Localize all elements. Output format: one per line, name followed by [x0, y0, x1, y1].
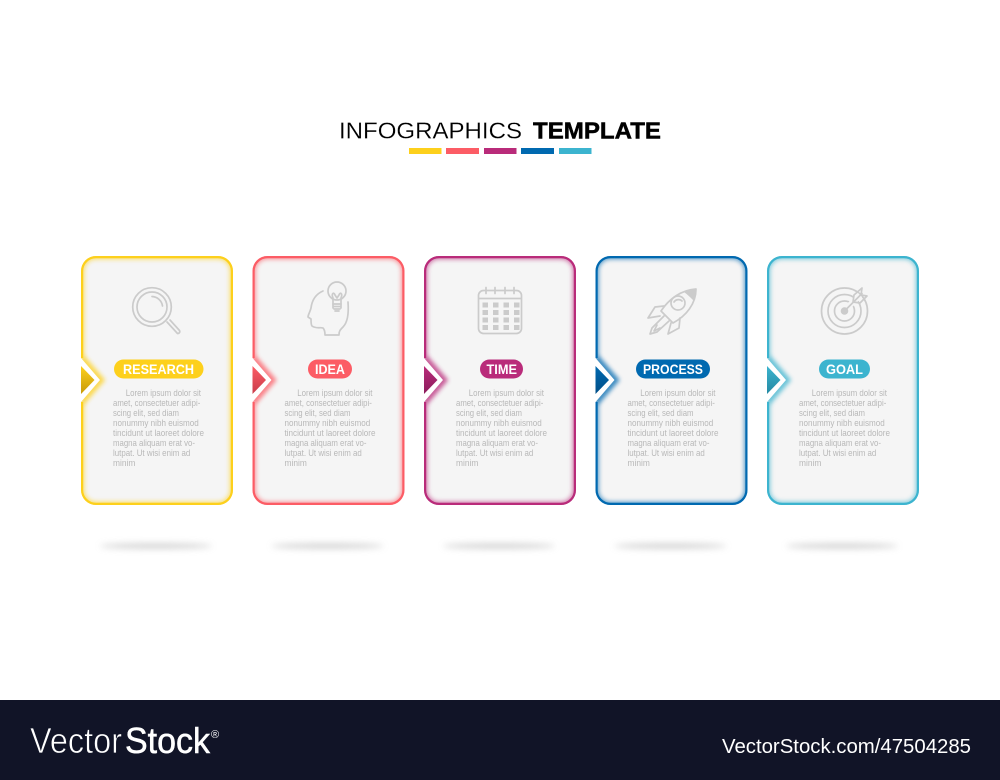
text block: idea: Lorem ipsum dolor sit — [297, 388, 373, 398]
text block: goal: nonummy nibh euismod — [799, 418, 885, 428]
icon: target with arrow — [822, 288, 868, 334]
text block: research: Lorem ipsum dolor sit — [126, 388, 201, 398]
text block: research: lutpat. Ut wisi enim ad — [113, 448, 190, 458]
arrow marker: time — [424, 366, 438, 394]
arrow marker: process — [596, 366, 609, 394]
footer logo: Stock — [125, 720, 211, 761]
text block: research: amet, consectetuer adipi- — [113, 398, 200, 408]
panel: idea — [252, 256, 404, 549]
text block: research: nonummy nibh euismod — [113, 418, 199, 428]
title: INFOGRAPHICS — [339, 118, 522, 144]
text block: goal: tincidunt ut laoreet dolore — [799, 428, 890, 438]
panel: process — [596, 256, 748, 549]
text block: idea — [284, 388, 376, 468]
text block: idea: magna aliquam erat vo- — [284, 438, 366, 448]
arrow marker: research — [81, 366, 94, 394]
text block: process: nonummy nibh euismod — [628, 418, 713, 428]
footer logo: ® — [211, 729, 219, 741]
title — [339, 118, 661, 144]
title: TEMPLATE — [533, 118, 661, 144]
text block: research: tincidunt ut laoreet dolore — [113, 428, 204, 438]
text block: time: amet, consectetuer adipi- — [456, 398, 543, 408]
icon: rocket — [648, 289, 696, 334]
icon: head with light bulb — [308, 282, 348, 335]
text block: idea: amet, consectetuer adipi- — [284, 398, 372, 408]
text block: process: magna aliquam erat vo- — [628, 438, 710, 448]
text block: research: minim — [113, 458, 135, 468]
text block: time: Lorem ipsum dolor sit — [469, 388, 544, 398]
text block: goal: lutpat. Ut wisi enim ad — [799, 448, 876, 458]
text block: research: scing elit, sed diam — [113, 408, 179, 418]
label: idea — [308, 360, 352, 378]
text block: research: magna aliquam erat vo- — [113, 438, 195, 448]
panel: goal — [767, 256, 919, 549]
title colour bars — [409, 148, 592, 154]
text block: process: scing elit, sed diam — [628, 408, 694, 418]
text block: process: Lorem ipsum dolor sit — [640, 388, 716, 398]
text block: goal: minim — [799, 458, 821, 468]
text block: process: lutpat. Ut wisi enim ad — [628, 448, 705, 458]
text block: time: lutpat. Ut wisi enim ad — [456, 448, 533, 458]
text block: goal — [799, 388, 890, 468]
text block: process — [628, 388, 718, 468]
icon: magnifying glass — [133, 288, 180, 334]
text block: time: nonummy nibh euismod — [456, 418, 542, 428]
label: time: TIME — [486, 362, 517, 377]
text block: goal: Lorem ipsum dolor sit — [812, 388, 887, 398]
text block: idea: lutpat. Ut wisi enim ad — [284, 448, 362, 458]
text block: idea: scing elit, sed diam — [284, 408, 350, 418]
text block: process: minim — [628, 458, 650, 468]
text block: time: tincidunt ut laoreet dolore — [456, 428, 547, 438]
text block: idea: nonummy nibh euismod — [284, 418, 370, 428]
text block: time: scing elit, sed diam — [456, 408, 522, 418]
text block: time: minim — [456, 458, 478, 468]
text block: time — [456, 388, 547, 468]
text block: goal: magna aliquam erat vo- — [799, 438, 881, 448]
label: research — [114, 360, 204, 378]
text block: process: tincidunt ut laoreet dolore — [628, 428, 718, 438]
label: goal: GOAL — [826, 362, 863, 377]
text block: time: magna aliquam erat vo- — [456, 438, 538, 448]
text block: process: amet, consectetuer adipi- — [628, 398, 715, 408]
text block: research — [113, 388, 204, 468]
text block: goal: scing elit, sed diam — [799, 408, 865, 418]
text block: idea: tincidunt ut laoreet dolore — [284, 428, 376, 438]
icon: calendar — [478, 288, 522, 334]
label: goal — [819, 360, 870, 378]
text block: goal: amet, consectetuer adipi- — [799, 398, 886, 408]
panel: time — [424, 256, 576, 549]
panel: research — [81, 256, 233, 549]
text block: idea: minim — [284, 458, 307, 468]
footer image id: VectorStock.com/47504285 — [722, 736, 971, 758]
footer logo: Vector — [30, 720, 122, 761]
arrow marker: idea — [252, 366, 266, 394]
label: idea: IDEA — [315, 362, 345, 377]
footer bar — [0, 700, 1000, 780]
label: process: PROCESS — [643, 362, 703, 377]
footer logo — [30, 720, 219, 761]
arrow marker: goal — [767, 366, 780, 394]
label: time — [480, 360, 523, 378]
label: research: RESEARCH — [123, 362, 194, 377]
